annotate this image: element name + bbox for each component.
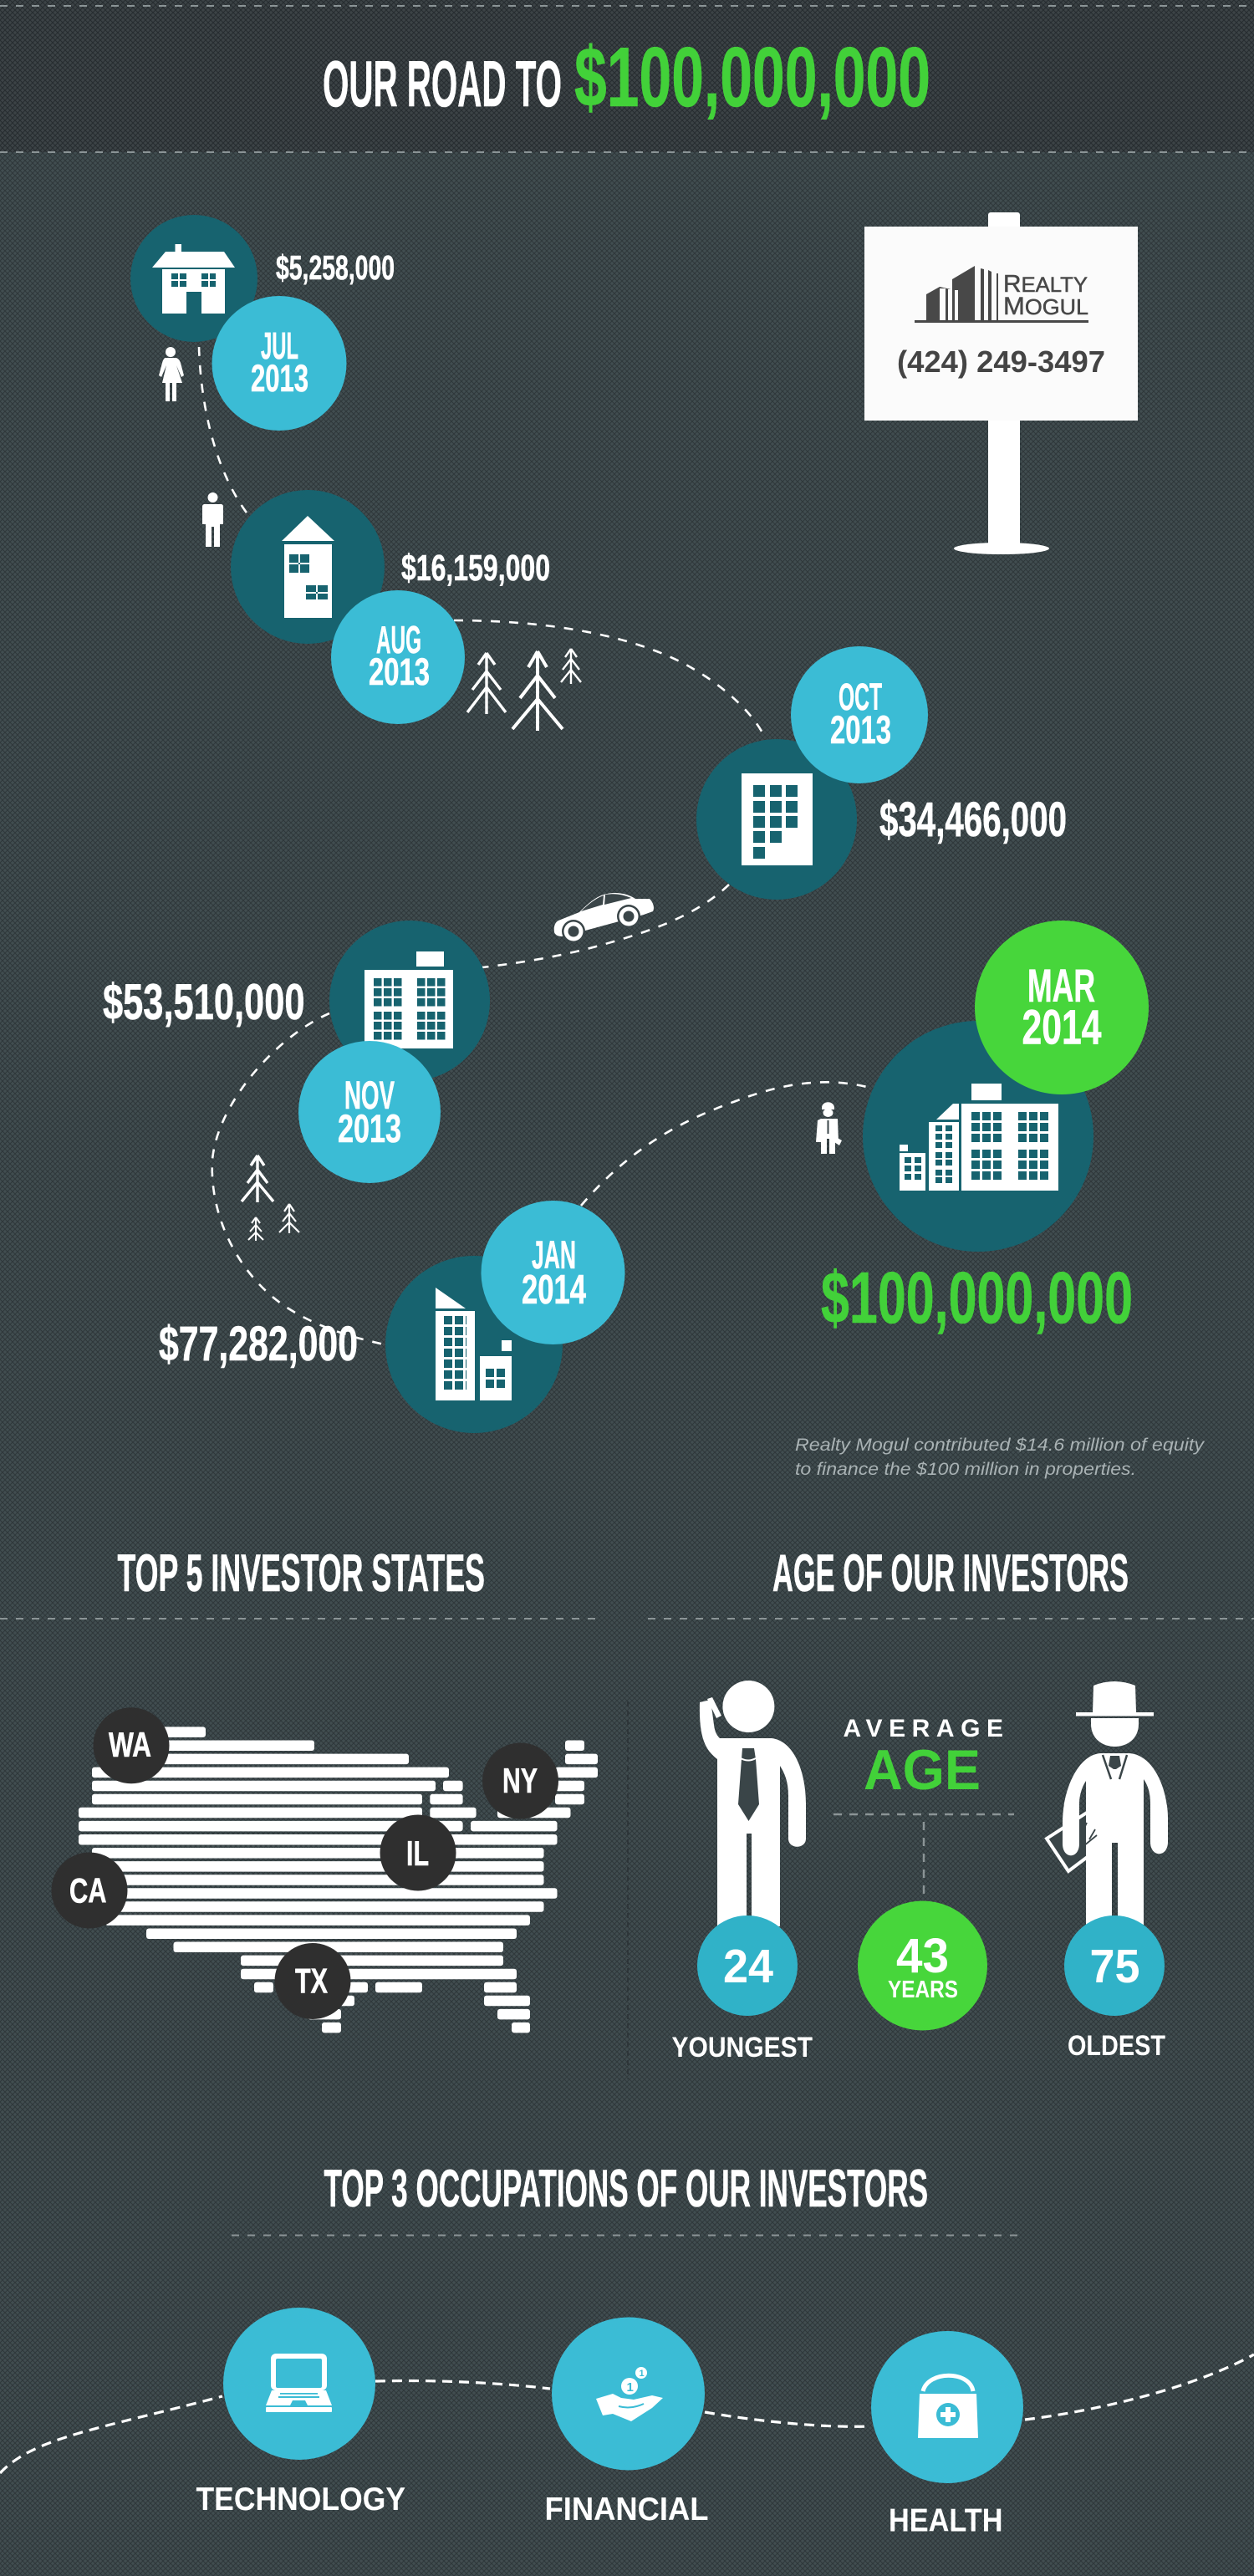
phone number: (424) 249-3497 — [897, 344, 1105, 379]
icon: trees near Nov — [242, 1155, 299, 1241]
milestone: Nov 2013: NOV — [344, 1073, 395, 1117]
state marker: WA: WA — [109, 1725, 151, 1764]
icon: construction worker — [816, 1102, 842, 1154]
icon: trees near Aug — [467, 649, 581, 731]
state marker: CA — [52, 1853, 127, 1928]
occupation: health — [871, 2331, 1023, 2538]
icon: car — [554, 893, 654, 943]
icon: medical bag — [918, 2375, 978, 2438]
milestone: Oct 2013: OCT — [839, 676, 882, 718]
icon: two towers — [436, 1288, 512, 1400]
state marker: IL: IL — [406, 1834, 429, 1873]
state marker: TX — [274, 1943, 351, 2019]
occupation: financial — [545, 2318, 709, 2528]
milestone: Mar 2014: MAR — [1027, 959, 1095, 1012]
stat: youngest 24: YOUNGEST — [672, 2032, 813, 2063]
logo: Realty Mogul: REALTY — [1003, 271, 1088, 298]
title: $100,000,000 — [574, 31, 930, 125]
state marker: NY — [482, 1742, 558, 1819]
state marker: WA — [94, 1707, 169, 1783]
average age: AGE — [864, 1738, 981, 1802]
icon: man — [202, 492, 223, 547]
milestone: Mar 2014 — [821, 921, 1149, 1339]
state marker: IL — [380, 1814, 456, 1891]
milestone: Oct 2013: $34,466,000 — [879, 793, 1067, 847]
occupation: technology — [196, 2308, 405, 2517]
equity note: to finance the $100 million in properties. — [795, 1460, 1136, 1479]
equity note: Realty Mogul contributed $14.6 million of equity — [795, 1436, 1206, 1455]
milestone: Jan 2014: 2014 — [522, 1268, 586, 1313]
equity note — [795, 1436, 1206, 1479]
icon: woman — [159, 347, 184, 401]
title — [323, 31, 930, 125]
icon: city block — [900, 1084, 1058, 1191]
milestone: Oct 2013: 2013 — [830, 707, 891, 752]
occupation: technology: TECHNOLOGY — [196, 2482, 405, 2517]
title: OUR ROAD TO — [323, 47, 562, 120]
icon: house — [152, 244, 235, 314]
milestone: Aug 2013: $16,159,000 — [401, 548, 550, 589]
icon: hand with coins: 1 — [627, 2380, 634, 2395]
stat: average 43 years: 43 — [896, 1929, 949, 1983]
occupation: health: HEALTH — [889, 2503, 1003, 2538]
milestone: Aug 2013: AUG — [376, 618, 421, 661]
map: US bars — [79, 1727, 598, 2033]
milestone: Jan 2014 — [159, 1201, 625, 1433]
stat: oldest 75: OLDEST — [1068, 2030, 1165, 2062]
icon: tower — [282, 516, 334, 618]
milestone: Jan 2014: JAN — [532, 1232, 576, 1277]
average age: AVERAGE — [843, 1715, 1003, 1742]
milestone: Jul 2013 — [130, 215, 395, 431]
milestone: Aug 2013: 2013 — [369, 650, 430, 693]
milestone: Jul 2013: JUL — [261, 324, 298, 367]
figure: oldest investor — [1047, 1681, 1168, 1925]
milestone: Jul 2013: $5,258,000 — [276, 248, 395, 287]
milestone: Nov 2013: 2013 — [338, 1106, 401, 1150]
heading: top 5 investor states: TOP 5 INVESTOR STATES — [117, 1544, 485, 1603]
state marker: CA: CA — [69, 1871, 107, 1910]
icon: laptop — [266, 2354, 332, 2412]
milestone: Aug 2013 — [231, 490, 550, 724]
stat: youngest 24: 24 — [723, 1940, 773, 1993]
state marker: TX: TX — [295, 1961, 328, 2000]
logo: Realty Mogul — [915, 266, 1088, 323]
stat: oldest 75: 75 — [1090, 1940, 1140, 1993]
icon: hand with coins: 1 — [639, 2369, 645, 2379]
stat: average 43 years — [858, 1901, 987, 2030]
state marker: NY: NY — [502, 1761, 538, 1800]
stat: average 43 years: YEARS — [888, 1977, 958, 2003]
icon: apartment block — [364, 951, 453, 1048]
occupation route — [0, 2354, 1254, 2473]
milestone: Mar 2014: 2014 — [1022, 1000, 1102, 1055]
average age — [833, 1715, 1014, 1900]
logo: Realty Mogul: MOGUL — [1003, 293, 1088, 320]
stat: oldest 75 — [1064, 1915, 1165, 2062]
sign post — [864, 212, 1138, 554]
milestone: Jul 2013: 2013 — [251, 357, 308, 400]
milestone: Nov 2013: $53,510,000 — [103, 974, 304, 1030]
icon: office block — [742, 773, 813, 865]
road: dashed route — [199, 347, 874, 1344]
milestone: Oct 2013 — [696, 646, 1067, 900]
figure: youngest investor — [700, 1681, 806, 1926]
milestone: Jan 2014: $77,282,000 — [159, 1317, 358, 1371]
milestone: Nov 2013 — [103, 921, 490, 1183]
stat: youngest 24 — [672, 1915, 813, 2063]
milestone: Mar 2014: $100,000,000 — [821, 1257, 1133, 1339]
icon: hand with coins — [596, 2367, 663, 2421]
occupation: financial: FINANCIAL — [545, 2492, 709, 2528]
